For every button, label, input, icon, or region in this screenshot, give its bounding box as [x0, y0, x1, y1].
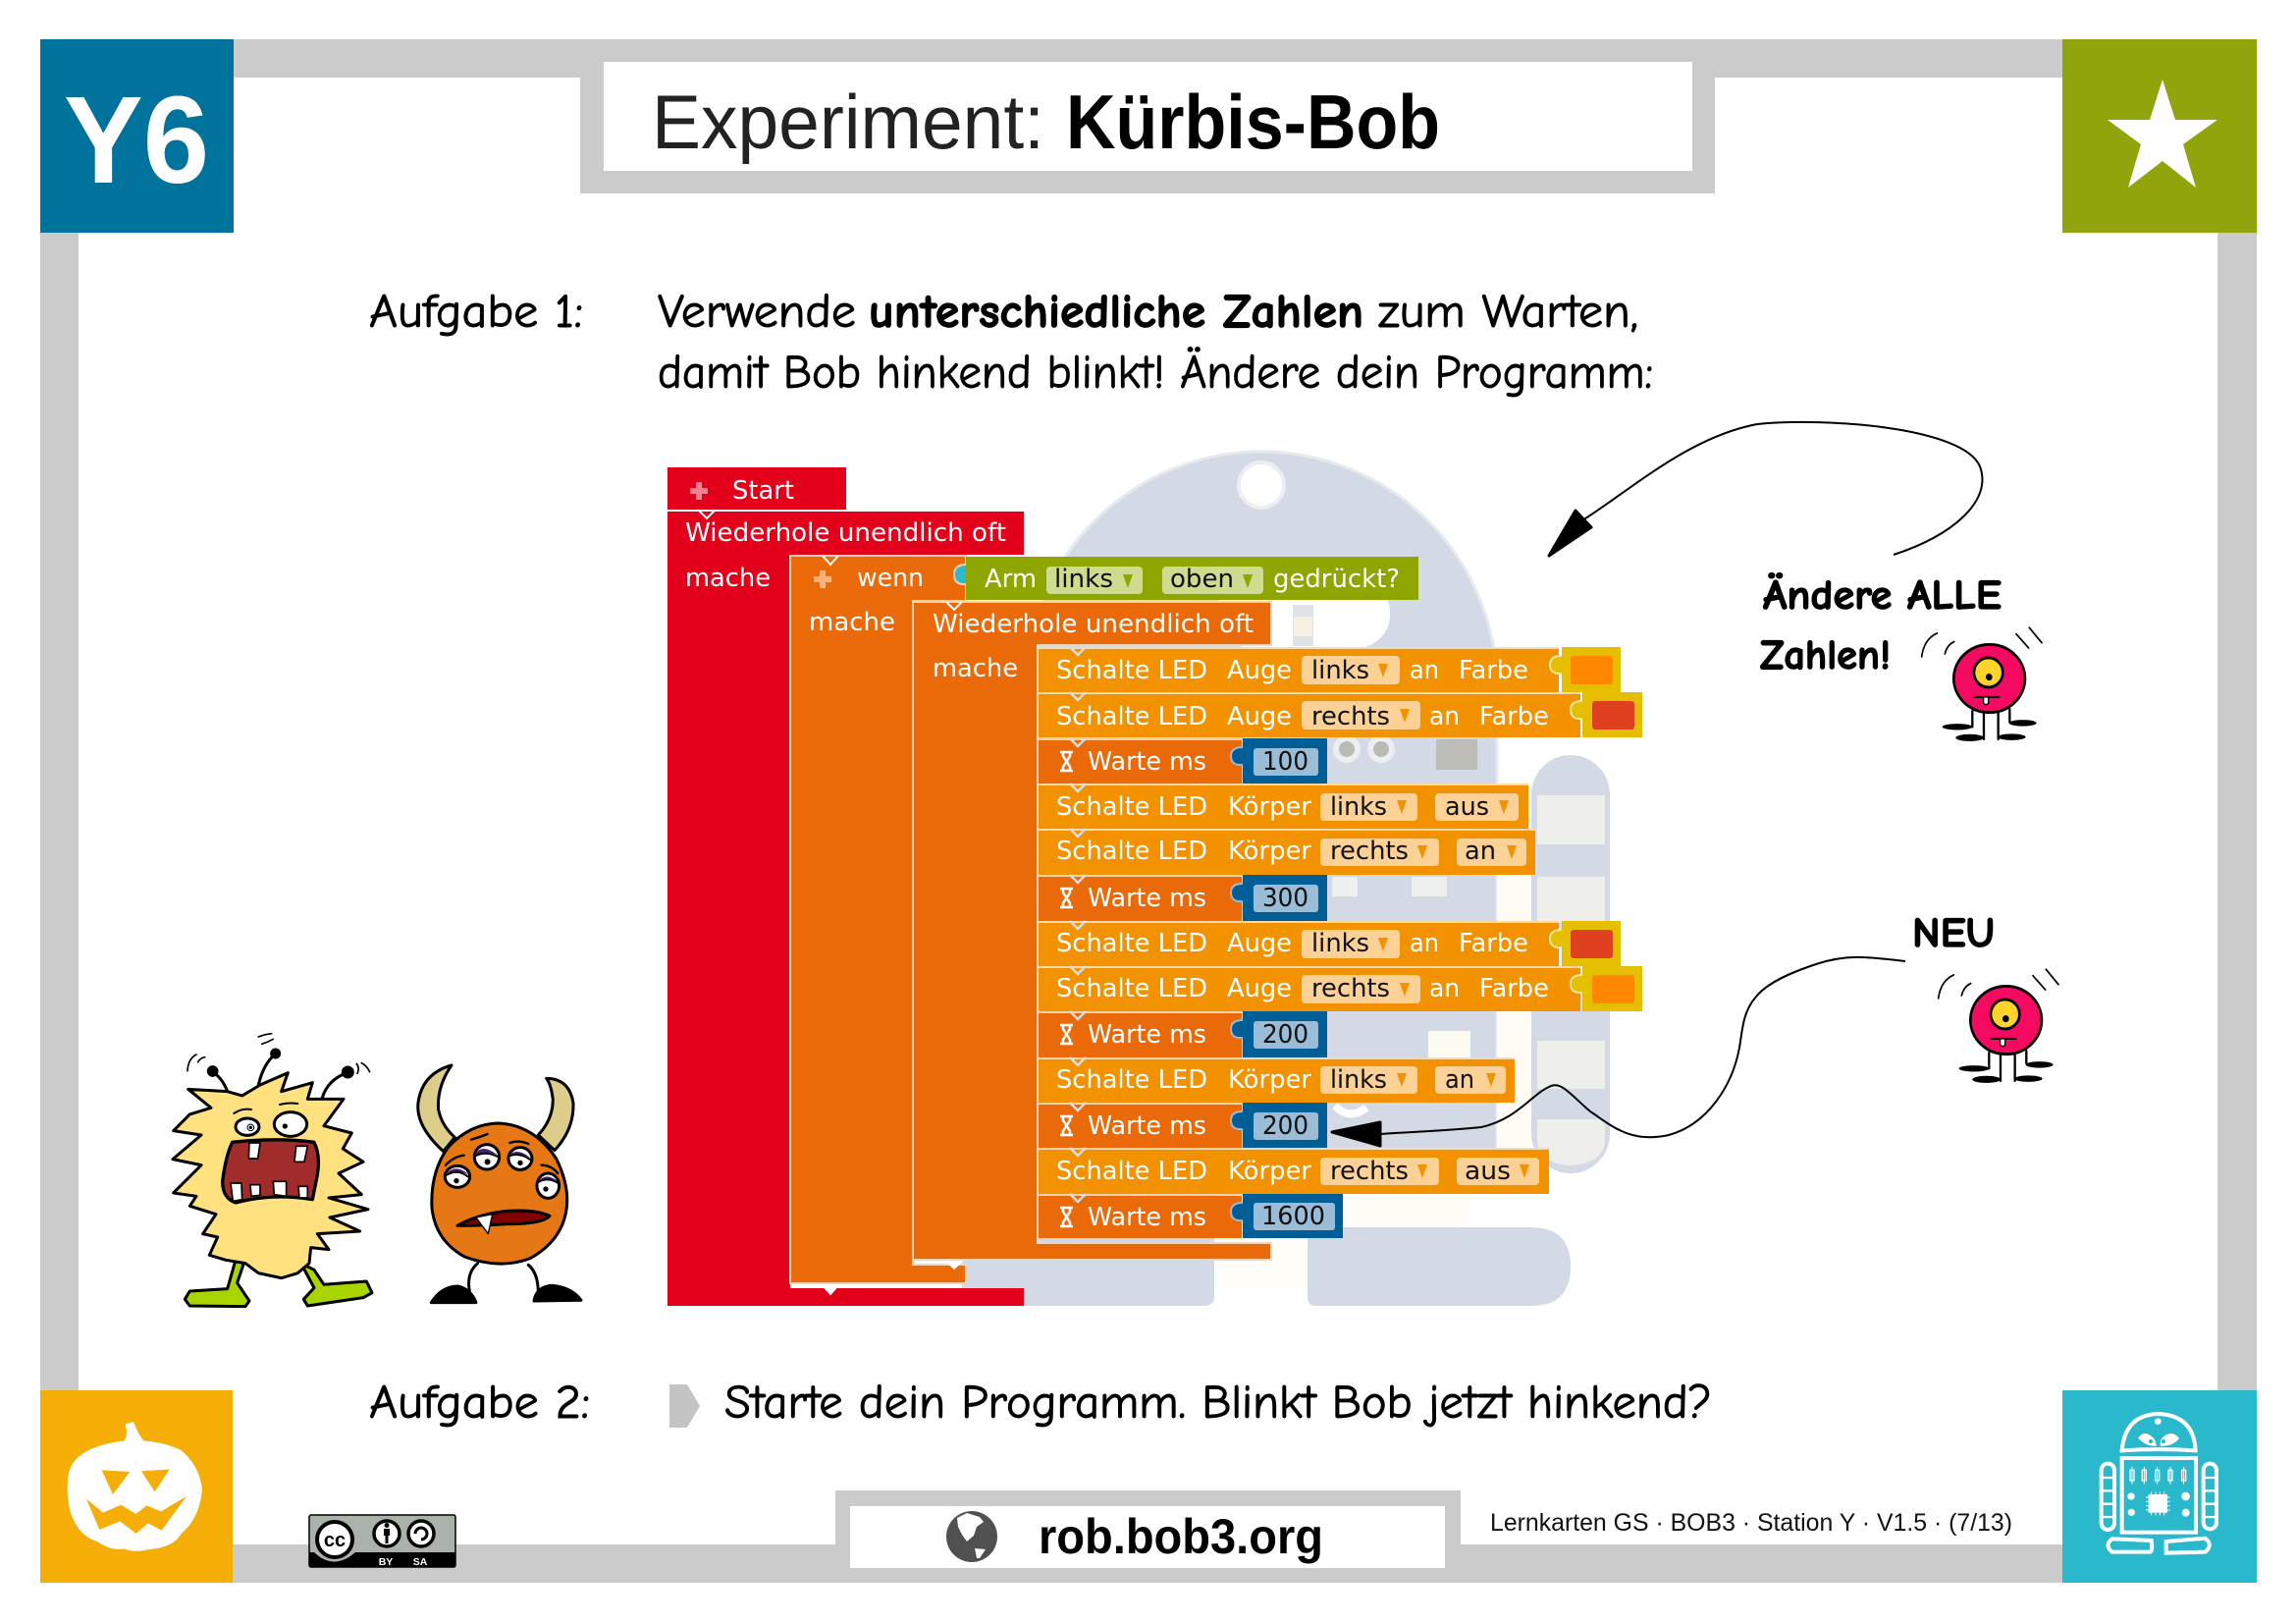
- row: LED body left off: [1038, 784, 1528, 829]
- Blockly program: [667, 467, 1642, 1306]
- block: if: wenn: [857, 564, 924, 593]
- task 2 label: Aufgabe 2:: [369, 1376, 590, 1431]
- task 1 text: unterschiedliche Zahlen: [869, 285, 1363, 340]
- monster: yellow spiky: [173, 1034, 372, 1307]
- block: inner repeat loop: [913, 602, 1271, 1269]
- block: outer repeat loop: [667, 511, 1024, 1306]
- Bob robot background: [962, 452, 1610, 1306]
- block: inner repeat loop: mache: [933, 654, 1018, 683]
- row: LED eye left red: Auge: [1227, 929, 1292, 958]
- row: LED body left on: Schalte LED: [1056, 1065, 1207, 1095]
- block: Start: Start: [732, 476, 794, 506]
- block: arm pressed condition: [966, 557, 1418, 600]
- block: arm pressed condition: oben: [1170, 565, 1234, 594]
- row: wait 300: Warte ms: [1088, 884, 1206, 913]
- monster: pink bottom: [1939, 969, 2058, 1083]
- row: LED eye left orange: Schalte LED: [1056, 656, 1207, 685]
- row: wait 1600: 1600: [1261, 1202, 1325, 1231]
- row: LED body right on: Schalte LED: [1056, 837, 1207, 866]
- row: LED body right on: [1038, 829, 1535, 875]
- row: LED body left off: links: [1330, 792, 1387, 822]
- row: LED eye right orange: Farbe: [1479, 974, 1549, 1003]
- row: LED eye left orange: links: [1311, 656, 1369, 685]
- label: NEU: NEU: [1912, 909, 1995, 957]
- task 1 text: [658, 285, 1653, 401]
- row: LED eye right orange: rechts: [1311, 974, 1390, 1003]
- row: wait 100: 100: [1262, 747, 1308, 777]
- task 1 text: damit Bob hinkend blinkt! Ändere dein Programm:: [658, 346, 1653, 401]
- row: LED eye left orange: Farbe: [1459, 656, 1528, 685]
- row: wait 1600: [1038, 1194, 1343, 1238]
- row: LED eye right red: Farbe: [1479, 702, 1549, 731]
- row: LED body right off: rechts: [1330, 1157, 1409, 1186]
- callout: change all numbers: [1760, 571, 2002, 679]
- row: LED body left off: Schalte LED: [1056, 792, 1207, 822]
- icon: globe: [946, 1511, 997, 1562]
- row: LED eye right orange: [1038, 966, 1642, 1011]
- row: LED body left on: [1038, 1057, 1515, 1103]
- block: Start: [667, 467, 846, 510]
- monster: pink top: [1922, 627, 2042, 741]
- arrow: to all numbers: [1549, 422, 1982, 556]
- row: LED eye right red: an: [1429, 702, 1460, 731]
- row: LED eye left orange: an: [1410, 656, 1439, 685]
- row: LED body right off: aus: [1465, 1157, 1511, 1186]
- footer link box: [835, 1490, 1461, 1583]
- badge: robot icon: [2062, 1390, 2257, 1583]
- title: Experiment:: [652, 79, 1044, 165]
- badge: pumpkin icon: [40, 1390, 233, 1583]
- block: inner repeat loop: Wiederhole unendlich oft: [933, 610, 1254, 639]
- row: LED eye left red: Farbe: [1459, 929, 1528, 958]
- row: wait 1600: Warte ms: [1088, 1203, 1206, 1232]
- row: LED eye left red: Schalte LED: [1056, 929, 1207, 958]
- callout: change all numbers: Zahlen!: [1760, 631, 1891, 679]
- icon: play arrow: [669, 1384, 700, 1428]
- arrow: to new wait: [1332, 957, 1905, 1146]
- block: if: mache: [809, 608, 895, 637]
- row: LED eye right orange: Auge: [1227, 974, 1292, 1003]
- licence badge CC BY SA: cc: [324, 1530, 346, 1551]
- block: arm pressed condition: gedrückt?: [1273, 565, 1400, 594]
- row: wait 200: [1038, 1011, 1327, 1057]
- row: LED body right on: Körper: [1228, 837, 1311, 866]
- block: arm pressed condition: Arm: [985, 565, 1037, 594]
- row: LED eye left red: [1038, 921, 1621, 966]
- task 2 text: Starte dein Programm. Blinkt Bob jetzt hinkend?: [724, 1376, 1712, 1431]
- row: LED eye right red: rechts: [1311, 702, 1390, 731]
- row: LED body right off: Schalte LED: [1056, 1157, 1207, 1186]
- title box: [580, 39, 1715, 193]
- row: wait 200 marked new: 200: [1262, 1111, 1308, 1141]
- row: LED body left on: Körper: [1228, 1065, 1311, 1095]
- row: LED eye right red: Schalte LED: [1056, 702, 1207, 731]
- block: outer repeat loop: Wiederhole unendlich oft: [685, 518, 1006, 548]
- row: LED body left off: Körper: [1228, 792, 1311, 822]
- row: wait 200 marked new: [1038, 1103, 1327, 1148]
- task 1 text: zum Warten,: [1378, 285, 1638, 340]
- monster: orange horned: [418, 1065, 581, 1303]
- row: LED body right off: [1038, 1148, 1549, 1194]
- badge: Y6: [40, 39, 234, 233]
- licence badge CC BY SA: [309, 1515, 455, 1568]
- row: LED eye right red: [1038, 692, 1642, 737]
- title: Kürbis-Bob: [1066, 79, 1440, 165]
- row: LED eye left orange: [1038, 647, 1621, 692]
- licence badge CC BY SA: SA: [413, 1556, 428, 1568]
- row: LED body left off: aus: [1445, 792, 1489, 822]
- row: LED body right off: Körper: [1228, 1157, 1311, 1186]
- block: if: [790, 556, 966, 1294]
- row: LED body right on: an: [1465, 837, 1496, 866]
- row: LED eye left orange: Auge: [1227, 656, 1292, 685]
- row: LED eye right orange: Schalte LED: [1056, 974, 1207, 1003]
- badge: Y6: Y6: [64, 71, 209, 209]
- footer link box: rob.bob3.org: [1039, 1509, 1323, 1564]
- row: wait 200: 200: [1262, 1020, 1308, 1050]
- task 1 label: Aufgabe 1:: [369, 285, 583, 340]
- row: LED body left on: links: [1330, 1065, 1387, 1095]
- block: arm pressed condition: links: [1054, 565, 1113, 594]
- row: wait 100: Warte ms: [1088, 747, 1206, 777]
- row: LED body right on: rechts: [1330, 837, 1409, 866]
- licence badge CC BY SA: BY: [379, 1556, 393, 1568]
- row: wait 300: 300: [1262, 884, 1308, 913]
- row: LED eye left red: links: [1311, 929, 1369, 958]
- row: wait 200: Warte ms: [1088, 1020, 1206, 1050]
- task 1 text: Verwende: [658, 285, 856, 340]
- callout: change all numbers: Ändere ALLE: [1763, 571, 2002, 620]
- row: LED eye right orange: an: [1429, 974, 1460, 1003]
- row: LED eye right red: Auge: [1227, 702, 1292, 731]
- row: wait 100: [1038, 738, 1327, 784]
- row: wait 300: [1038, 875, 1327, 921]
- footer version text: Lernkarten GS · BOB3 · Station Y · V1.5 · (7/13): [1490, 1509, 2012, 1537]
- block: outer repeat loop: mache: [685, 564, 771, 593]
- row: LED eye left red: an: [1410, 929, 1439, 958]
- row: LED body left on: an: [1445, 1065, 1474, 1095]
- row: wait 200 marked new: Warte ms: [1088, 1111, 1206, 1141]
- badge: star: [2062, 39, 2257, 233]
